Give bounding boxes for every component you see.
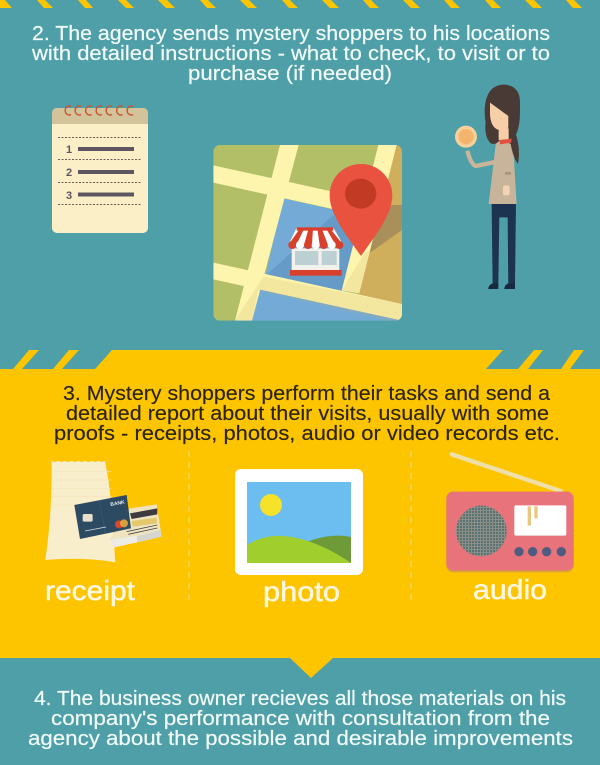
heading: step 3: detailed report about their visits, usually with some [66,403,549,425]
heading: step 2 [31,23,550,85]
heading: step 4: 4. The business owner recieves all those materials on his [34,688,566,710]
icon: receipt and bank cards [45,461,162,562]
icon: notepad checklist [52,106,148,233]
icon: photo frame [235,469,363,575]
heading: step 4 [28,688,573,750]
icon: notepad checklist: 1 [66,144,72,156]
left and right stripe tabs [13,350,584,369]
heading: step 2: purchase (if needed) [188,63,392,85]
top hazard stripes [0,0,582,8]
heading: step 3: 3. Mystery shoppers perform their tasks and send a [63,383,551,405]
icon: receipt and bank cards: BANK [110,499,126,508]
map with location pin and shop [213,145,402,322]
icon: notepad checklist: 2 [66,167,72,179]
icon: radio [446,454,574,572]
heading: step 3: proofs - receipts, photos, audio or video records etc. [54,423,560,445]
icon: shop [288,227,343,276]
label: receipt: receipt [45,575,135,606]
heading: step 4: agency about the possible and desirable improvements [28,728,573,750]
heading: step 3 [54,383,560,445]
heading: step 2: 2. The agency sends mystery shoppers to his locations [32,23,550,45]
heading: step 2: with detailed instructions - what to check, to visit or to [31,43,550,65]
dashed column dividers [189,451,411,602]
icon: woman holding a coin [455,85,520,289]
icon: notepad checklist: 3 [66,190,72,202]
panel: step 3 yellow background [0,350,600,678]
icon: location pin [330,164,392,256]
label: photo: photo [263,576,340,607]
heading: step 4: company's performance with consultation from the [51,708,550,730]
label: audio: audio [473,574,547,605]
